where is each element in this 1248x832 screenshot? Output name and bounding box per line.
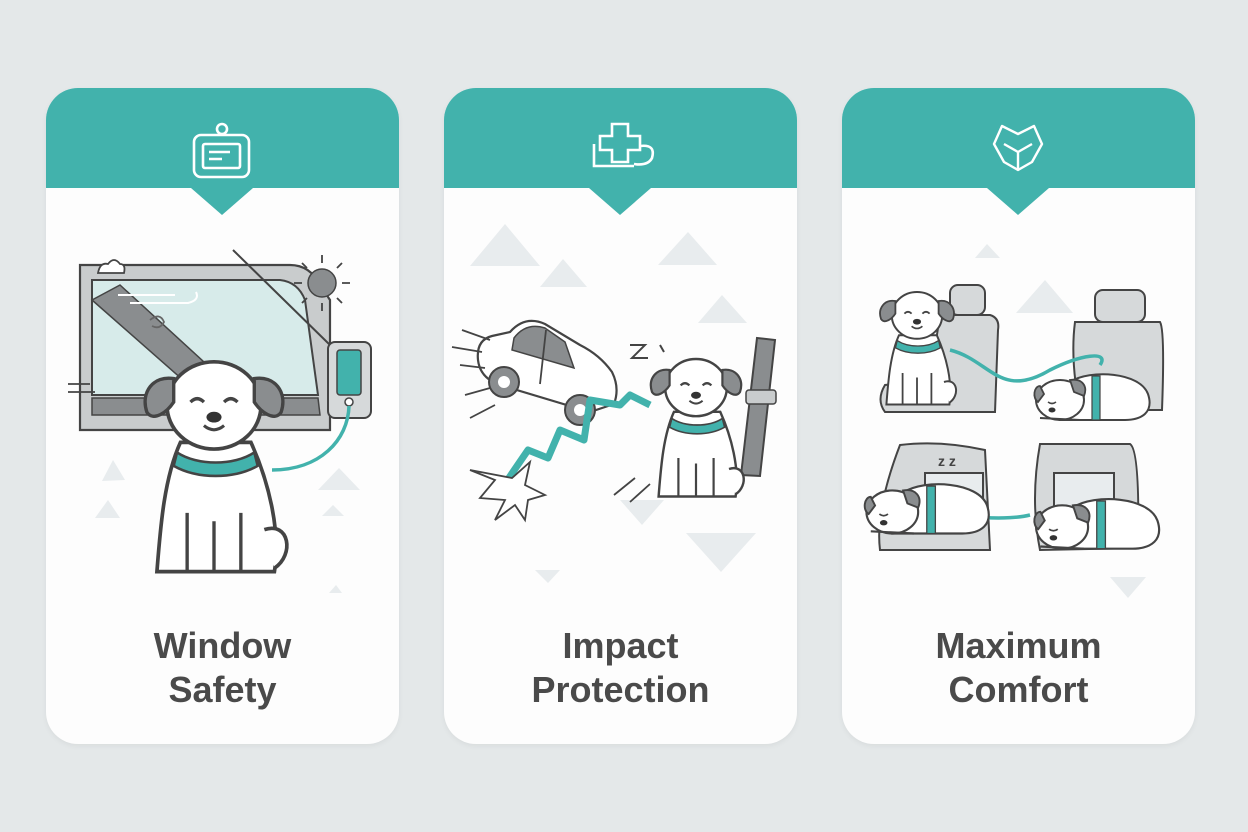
car bbox=[478, 321, 617, 425]
title: Comfort bbox=[948, 669, 1088, 710]
illustration: dog at car window bbox=[68, 249, 372, 593]
title bbox=[531, 625, 710, 710]
illustration: crash and harness bbox=[452, 224, 777, 583]
header pointer bbox=[191, 188, 253, 215]
title bbox=[935, 625, 1102, 710]
icon: id badge bbox=[192, 122, 250, 178]
illustration: dogs on car seats bbox=[864, 244, 1164, 598]
panel: maximum comfort bbox=[842, 88, 1195, 744]
title: Impact bbox=[562, 625, 679, 666]
illustration: dogs on car seats: z z bbox=[938, 453, 956, 469]
title: Window bbox=[154, 625, 291, 666]
header band bbox=[46, 88, 399, 188]
title: Protection bbox=[531, 669, 710, 710]
panel: window safety bbox=[46, 88, 399, 744]
icon: medical plus bbox=[592, 122, 654, 168]
icon: dog face bbox=[992, 124, 1044, 172]
title: Maximum bbox=[935, 625, 1102, 666]
title bbox=[154, 625, 292, 710]
title: Safety bbox=[168, 669, 277, 710]
panel: impact protection bbox=[444, 88, 797, 744]
